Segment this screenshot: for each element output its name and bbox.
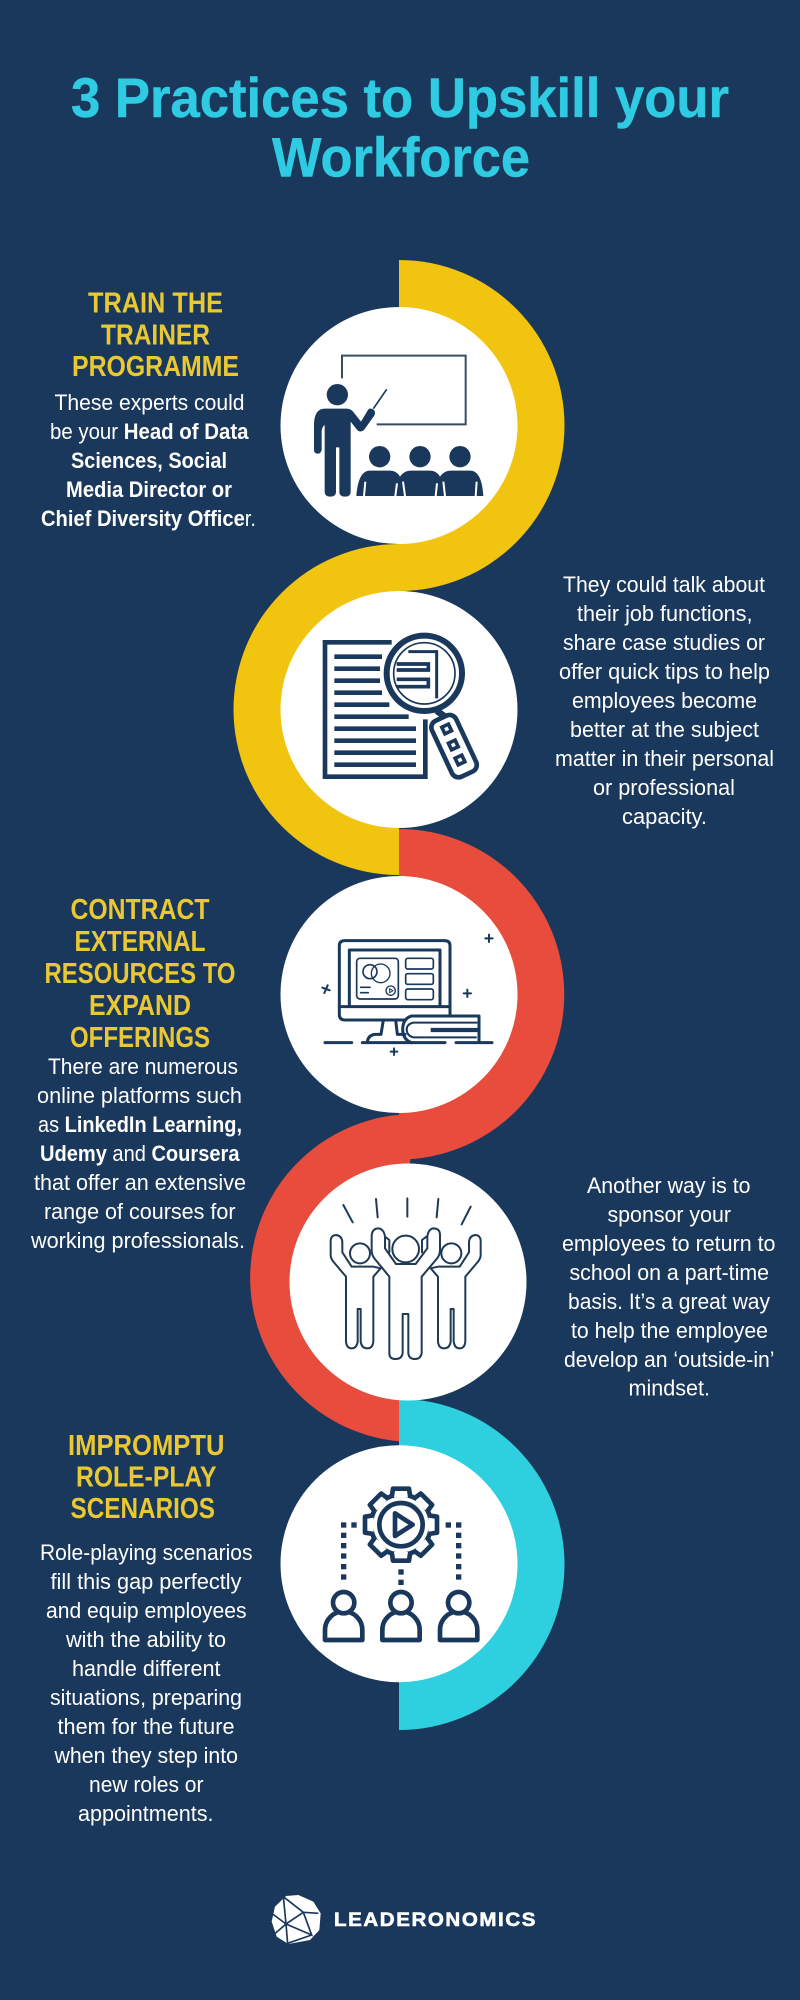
text: role-playing benefits: situations, preparing [50,1685,242,1710]
text: experts description: be your Head of Data [50,419,249,444]
text: role-playing benefits [40,1540,252,1826]
heading: impromptu role-play scenarios: SCENARIOS [70,1493,215,1525]
text: online platforms: online platforms such [37,1083,242,1108]
text: sponsor part-time school [562,1173,776,1400]
text: experts description: These experts could [54,390,244,415]
text: sponsor part-time school: basis. It’s a great way [568,1289,770,1314]
text: role-playing benefits: with the ability to [65,1627,226,1652]
text: role-playing benefits: fill this gap perfectly [50,1569,242,1594]
text: sponsor part-time school: develop an ‘outside-in’ [564,1347,774,1372]
icon: document under magnifying glass [280,591,518,828]
text: role-playing benefits: new roles or [89,1772,204,1797]
ribbon: yellow left arc [233,544,399,875]
logo wordmark: LEADERONOMICS [334,1909,537,1931]
text: sponsor part-time school: sponsor your [608,1202,731,1227]
text: role-playing benefits: when they step into [54,1743,238,1768]
heading: train the trainer programme: TRAINER [101,320,210,352]
icon: faceted logo mark [272,1895,321,1944]
text: online platforms [30,1054,246,1253]
text: job functions and case studies [555,572,774,829]
text: role-playing benefits: and equip employees [46,1598,246,1623]
text: role-playing benefits: appointments. [78,1801,214,1826]
text: online platforms: Udemy and Coursera [40,1141,240,1166]
heading: train the trainer programme: PROGRAMME [72,351,239,383]
icon: trainer with whiteboard and audience [280,307,518,544]
text: sponsor part-time school: employees to return to [562,1231,776,1256]
text: job functions and case studies: employees become [572,688,757,713]
ribbon: teal right arc [399,1399,564,1730]
ribbon: yellow right arc [399,260,564,591]
text: job functions and case studies: their job functions, [577,601,752,626]
title [71,66,729,188]
text: sponsor part-time school: school on a part-time [570,1260,769,1285]
icon: online course on monitor with book [280,876,518,1113]
text: online platforms: working professionals. [30,1228,245,1253]
heading: contract external resources: OFFERINGS [70,1022,210,1054]
text: experts description: Media Director or [66,477,232,502]
title: 3 Practices to Upskill your [71,66,729,129]
heading: train the trainer programme: TRAIN THE [88,288,223,320]
ribbon: red left arc [250,1114,414,1441]
heading: contract external resources: EXPAND [89,990,191,1022]
heading: impromptu role-play scenarios [68,1430,224,1525]
heading: train the trainer programme [72,288,239,383]
text: job functions and case studies: share case studies or [563,630,765,655]
text: sponsor part-time school: mindset. [628,1376,710,1400]
title: Workforce [272,126,530,188]
heading: contract external resources: RESOURCES TO [44,958,236,990]
section 2: contract external resources [30,894,246,1253]
section 1: train the trainer [41,288,256,531]
section 3: impromptu role-play [40,1430,252,1826]
text: online platforms: that offer an extensive [34,1170,246,1195]
text: experts description [41,390,256,531]
text: job functions and case studies: offer quick tips to help [559,659,770,684]
logo: leaderonomics [272,1895,537,1944]
text: job functions and case studies: matter in their personal [555,746,774,771]
ribbon: red right arc [399,829,564,1160]
heading: impromptu role-play scenarios: IMPROMPTU [68,1430,224,1462]
heading: contract external resources [44,894,236,1054]
text: job functions and case studies: or professional [593,775,735,800]
icon: three people cheering [290,1164,526,1400]
text: job functions and case studies: capacity. [622,804,707,829]
text: job functions and case studies: better at the subject [570,717,759,742]
winding ribbon [233,260,564,1730]
heading: contract external resources: EXTERNAL [74,926,206,958]
heading: contract external resources: CONTRACT [70,894,210,926]
text: role-playing benefits: Role-playing scenarios [40,1540,252,1565]
text: online platforms: range of courses for [44,1199,236,1224]
text: experts description: Chief Diversity Officer. [41,506,256,531]
text: sponsor part-time school: Another way is to [587,1173,750,1198]
text: role-playing benefits: handle different [72,1656,220,1681]
text: online platforms: as LinkedIn Learning, [38,1112,242,1137]
text: job functions and case studies: They could talk about [563,572,765,597]
text: online platforms: There are numerous [48,1054,238,1079]
heading: impromptu role-play scenarios: ROLE-PLAY [76,1462,216,1494]
icon: gear with play button linked to three people [280,1445,518,1682]
text: experts description: Sciences, Social [71,448,227,473]
text: role-playing benefits: them for the future [58,1714,234,1739]
text: sponsor part-time school: to help the employee [571,1318,768,1343]
